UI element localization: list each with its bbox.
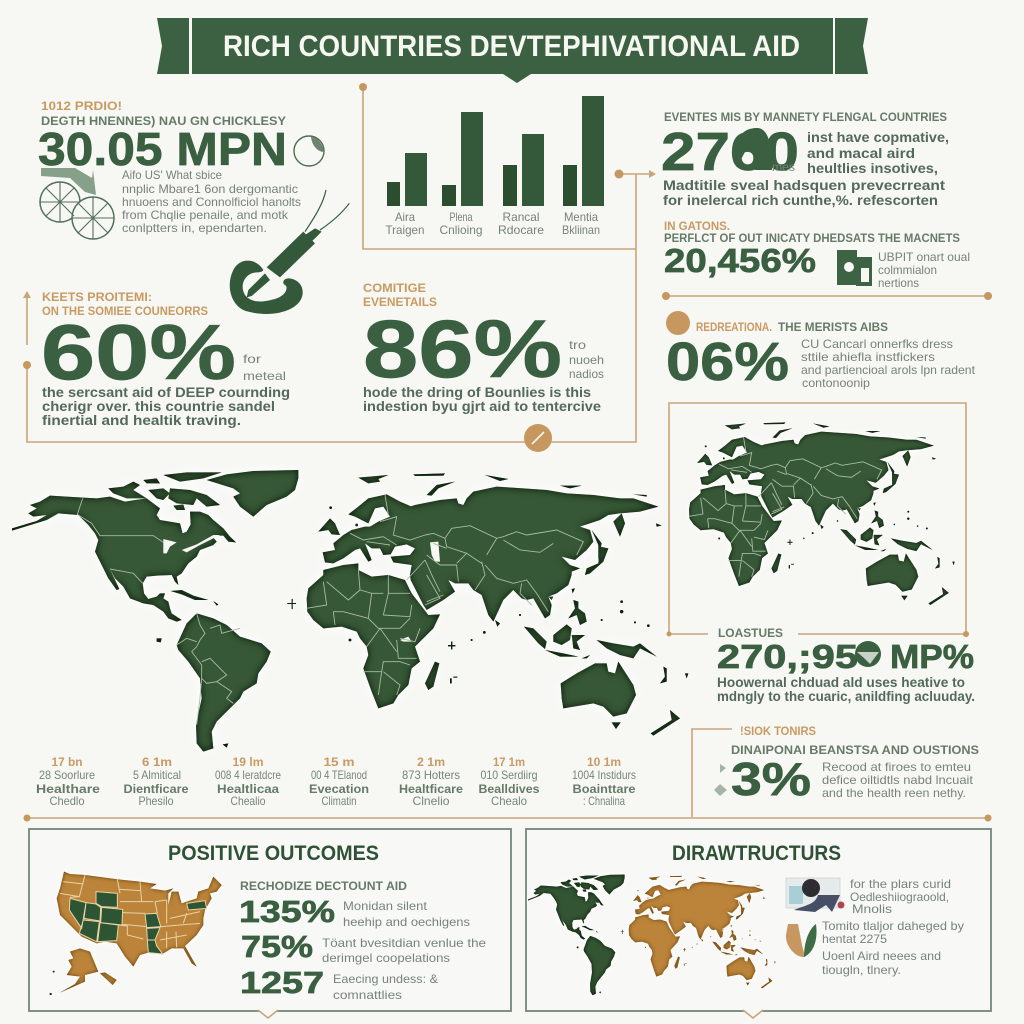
panel: top-left stat: 30.05 MPN xyxy=(38,123,287,175)
panel: 3% stat: DINAIPONAI BEANSTSA AND OUSTIONS xyxy=(731,743,979,757)
panel: top-left stat: conlptters in, ependarten. xyxy=(122,221,267,235)
panel: 06% stat: contonoonip xyxy=(802,376,870,390)
panel: 86% stat: nadios xyxy=(569,367,604,381)
panel: positive outcomes xyxy=(29,829,511,1011)
chevron: distractors xyxy=(743,1010,763,1018)
panel: 270,950 MP% stat: MP% xyxy=(890,638,974,675)
panel: distractors: Tomito tlaljor daheged by xyxy=(822,919,964,933)
panel: 86% stat xyxy=(363,281,604,414)
stat row: seven regional figures: Clnelio xyxy=(412,794,450,808)
bar chart xyxy=(386,96,604,237)
panel: 2700 stat: heultlies insotives, xyxy=(807,160,938,176)
panel: 06% stat: REDREATIONA. xyxy=(696,320,772,334)
panel: 86% stat: EVENETAILS xyxy=(363,295,437,309)
panel: 06% stat: THE MERISTS AIBS xyxy=(778,320,888,334)
stat row: seven regional figures: 17 bn xyxy=(52,755,82,769)
stat row: seven regional figures: 00 4 TElanod xyxy=(311,768,367,782)
stat row: seven regional figures: 10 1m xyxy=(587,755,621,769)
panel: 270,950 MP% stat: 270,;95 xyxy=(717,638,858,675)
icon: tan coin xyxy=(666,311,690,335)
panel: 60% stat xyxy=(41,290,290,428)
panel: 2700 stat: 2760 xyxy=(661,122,799,182)
panel: top-left stat: from Chqlie penaile, and motk xyxy=(122,208,289,222)
panel: 270,950 MP% stat xyxy=(717,626,975,704)
map: United States xyxy=(49,872,222,995)
panel: positive outcomes: 75% xyxy=(241,929,313,964)
panel: 60% stat: KEETS PROITEMI: xyxy=(42,290,152,304)
panel: positive outcomes: 135% xyxy=(239,894,335,929)
panel: 3% stat: !SIOK TONIRS xyxy=(740,724,816,738)
panel: 86% stat: 86% xyxy=(363,304,562,395)
panel: 270,950 MP% stat: mdngly to the cuaric, anildfing acluuday. xyxy=(717,688,975,704)
panel: positive outcomes: derimgel coopelations xyxy=(322,951,450,965)
panel: 06% stat xyxy=(666,311,976,392)
divider with dots xyxy=(662,292,992,300)
panel: distractors: Mnolis xyxy=(852,902,892,916)
bar chart: Rdocare xyxy=(498,223,544,237)
icon: wheels and arm xyxy=(40,168,114,239)
panel: 86% stat: COMITIGE xyxy=(363,281,426,295)
panel: 60% stat: cherigr over. this countrie sandel xyxy=(42,398,275,414)
stat row: seven regional figures: 15 m xyxy=(324,755,354,769)
panel: distractors: for the plars curid xyxy=(850,877,951,891)
stat row: seven regional figures: 6 1m xyxy=(142,755,172,769)
bar chart: Mentia xyxy=(564,210,598,224)
bar chart: Aira xyxy=(395,210,415,224)
inset map: Africa Asia Australia xyxy=(689,422,955,605)
panel: 270,950 MP% stat: Hoowernal chduad ald uses heative to xyxy=(717,674,965,690)
heading: dirawtructurs: DIRAWTRUCTURS xyxy=(672,842,841,865)
stat row: seven regional figures: Dientficare xyxy=(124,782,189,796)
panel: 60% stat: for xyxy=(243,352,261,366)
panel: 06% stat: 06% xyxy=(666,332,789,392)
panel: 2700 stat: EVENTES MIS BY MANNETY FLENGAL COUNTRIES xyxy=(664,110,947,124)
panel: top-left stat xyxy=(38,99,301,235)
stat row: seven regional figures: Chealo xyxy=(491,794,527,808)
icon: vase and leaf xyxy=(786,924,816,957)
panel: top-left stat: nnplic Mbare1 6on dergomantic xyxy=(122,182,298,196)
stat row: seven regional figures: 5 Almitical xyxy=(133,768,181,782)
panel: top-left stat: hnuoens and Connolficiol hanolts xyxy=(122,195,301,209)
connector lines xyxy=(23,83,656,442)
bottom divider line xyxy=(24,814,992,822)
panel: 3% stat: and the health reen nethy. xyxy=(822,786,966,800)
panel: positive outcomes: Monidan silent xyxy=(343,899,428,913)
panel: positive outcomes: 1257 xyxy=(240,965,324,1000)
stat row: seven regional figures: Boainttare xyxy=(572,782,636,796)
stat row: seven regional figures: 28 Soorlure xyxy=(39,768,95,782)
panel: 06% stat: and partiencioal arols lpn radent xyxy=(801,363,976,377)
panel: 2700 stat: mes xyxy=(772,160,795,174)
panel: top-left stat: Aifo US' What sbice xyxy=(122,168,222,182)
stat row: seven regional figures: Evecation xyxy=(309,782,369,796)
icon: people illustration xyxy=(786,878,844,912)
panel: 86% stat: nuoeh xyxy=(569,353,604,367)
title banner: RICH COUNTRIES DEVTEPHIVATIONAL AID xyxy=(223,30,800,63)
panel: 20,456% stat: PERFLCT OF OUT INICATY DHEDSATS THE MACNETS xyxy=(664,231,960,245)
stat row: seven regional figures: 17 1m xyxy=(493,755,525,769)
main world map xyxy=(12,470,688,752)
stat row: seven regional figures: 1004 Instidurs xyxy=(572,768,636,782)
panel: 60% stat: meteal xyxy=(243,369,286,383)
bar chart: Rancal xyxy=(502,210,540,224)
stat row: seven regional figures: 19 lm xyxy=(232,755,264,769)
panel: 60% stat: ON THE SOMIEE COUNEORRS xyxy=(42,304,208,318)
stat row: seven regional figures: Healtficare xyxy=(399,782,463,796)
stat row: seven regional figures xyxy=(36,755,636,808)
panel: 2700 stat: Madtitile sveal hadsquen prevecrreant xyxy=(663,177,945,193)
panel: 20,456% stat: 20,456% xyxy=(664,242,816,279)
heading: positive outcomes: POSITIVE OUTCOMES xyxy=(168,842,379,865)
icon: small globe xyxy=(855,641,881,667)
panel: 2700 stat: and macal aird xyxy=(807,145,915,161)
stat row: seven regional figures: Climatin xyxy=(322,794,356,808)
panel: 270,950 MP% stat: LOASTUES xyxy=(718,626,783,640)
panel: 20,456% stat: IN GATONS. xyxy=(664,219,730,233)
panel: top-left stat: DEGTH HNENNES) NAU GN CHICKLESY xyxy=(41,114,286,128)
panel: 86% stat: hode the dring of Bounlies is this xyxy=(363,384,591,400)
panel: distractors: hentat 2275 xyxy=(822,932,887,946)
panel: 3% stat: 3% xyxy=(731,753,811,805)
panel: 20,456% stat: UBPIT onart oual xyxy=(878,250,970,264)
panel: positive outcomes: comnattlies xyxy=(333,988,402,1002)
panel: distractors: tiougln, tlnery. xyxy=(822,963,901,977)
panel: 2700 stat: for inelercal rich cunthe,%. refescorten xyxy=(663,192,938,208)
panel: 06% stat: sttile ahiefla instfickers xyxy=(801,350,935,364)
panel: 20,456% stat xyxy=(664,219,970,290)
panel: 60% stat: 60% xyxy=(41,308,236,396)
stat row: seven regional figures: Healthare xyxy=(36,782,100,796)
panel: positive outcomes: heehip and oechigens xyxy=(343,915,470,929)
panel: 20,456% stat: colmmialon xyxy=(878,263,937,277)
inset map frame xyxy=(666,403,969,637)
stat row: seven regional figures: Healtlicaa xyxy=(217,782,279,796)
stat row: seven regional figures: : Chnalina xyxy=(583,794,625,808)
panel: 86% stat: tro xyxy=(569,338,586,352)
bar chart: Cnlioing xyxy=(440,223,482,237)
bar chart: Bkliinan xyxy=(562,223,600,237)
stat row: seven regional figures: Bealldives xyxy=(478,782,540,796)
stat row: seven regional figures: 873 Hotters xyxy=(402,768,460,782)
chevron: positive outcomes xyxy=(258,1010,278,1018)
panel: 3% stat xyxy=(692,724,979,817)
panel: top-left stat: 1012 PRDIO! xyxy=(41,99,122,113)
panel: positive outcomes: RECHODIZE DECTOUNT AID xyxy=(240,879,407,893)
panel: 2700 stat xyxy=(661,110,949,208)
icon: globe xyxy=(294,136,324,166)
panel: 20,456% stat: nertions xyxy=(878,276,919,290)
bar chart: Traigen xyxy=(386,223,424,237)
icon: shovel tool xyxy=(230,190,349,314)
panel: 60% stat: the sercsant aid of DEEP cournding xyxy=(42,384,290,400)
stat row: seven regional figures: Phesilo xyxy=(138,794,174,808)
panel: 3% stat: Recood at firoes to emteu xyxy=(822,760,971,774)
bar chart: Plena xyxy=(450,210,473,224)
panel: distractors xyxy=(526,829,991,1011)
panel: 06% stat: CU Cancarl onnerfks dress xyxy=(801,337,953,351)
panel: positive outcomes: Eaecing undess: & xyxy=(333,972,438,986)
stat row: seven regional figures: 010 Serdiirg xyxy=(480,768,538,782)
panel: 60% stat: finertial and healtik traving. xyxy=(42,412,241,428)
stat row: seven regional figures: 2 1m xyxy=(417,755,445,769)
panel: 86% stat: indestion byu gjrt aid to tentercive xyxy=(363,398,601,414)
map: two-tone world xyxy=(528,874,776,995)
stat row: seven regional figures: Chedlo xyxy=(50,794,85,808)
panel: distractors: Oedleshiiograoold, xyxy=(850,890,949,904)
stat row: seven regional figures: 008 4 Ieratdcre xyxy=(215,768,281,782)
icon: document and phone xyxy=(837,250,872,286)
panel: positive outcomes: Töant bvesitdian venlue the xyxy=(322,936,486,950)
panel: 3% stat: defice oiltidtls nabd lncuait xyxy=(822,773,974,787)
title banner xyxy=(157,18,868,83)
panel: 2700 stat: inst have copmative, xyxy=(807,129,949,145)
icon: tan medallion xyxy=(524,424,552,452)
panel: distractors: Uoenl Aird neees and xyxy=(822,949,941,963)
stat row: seven regional figures: Chealio xyxy=(230,794,266,808)
